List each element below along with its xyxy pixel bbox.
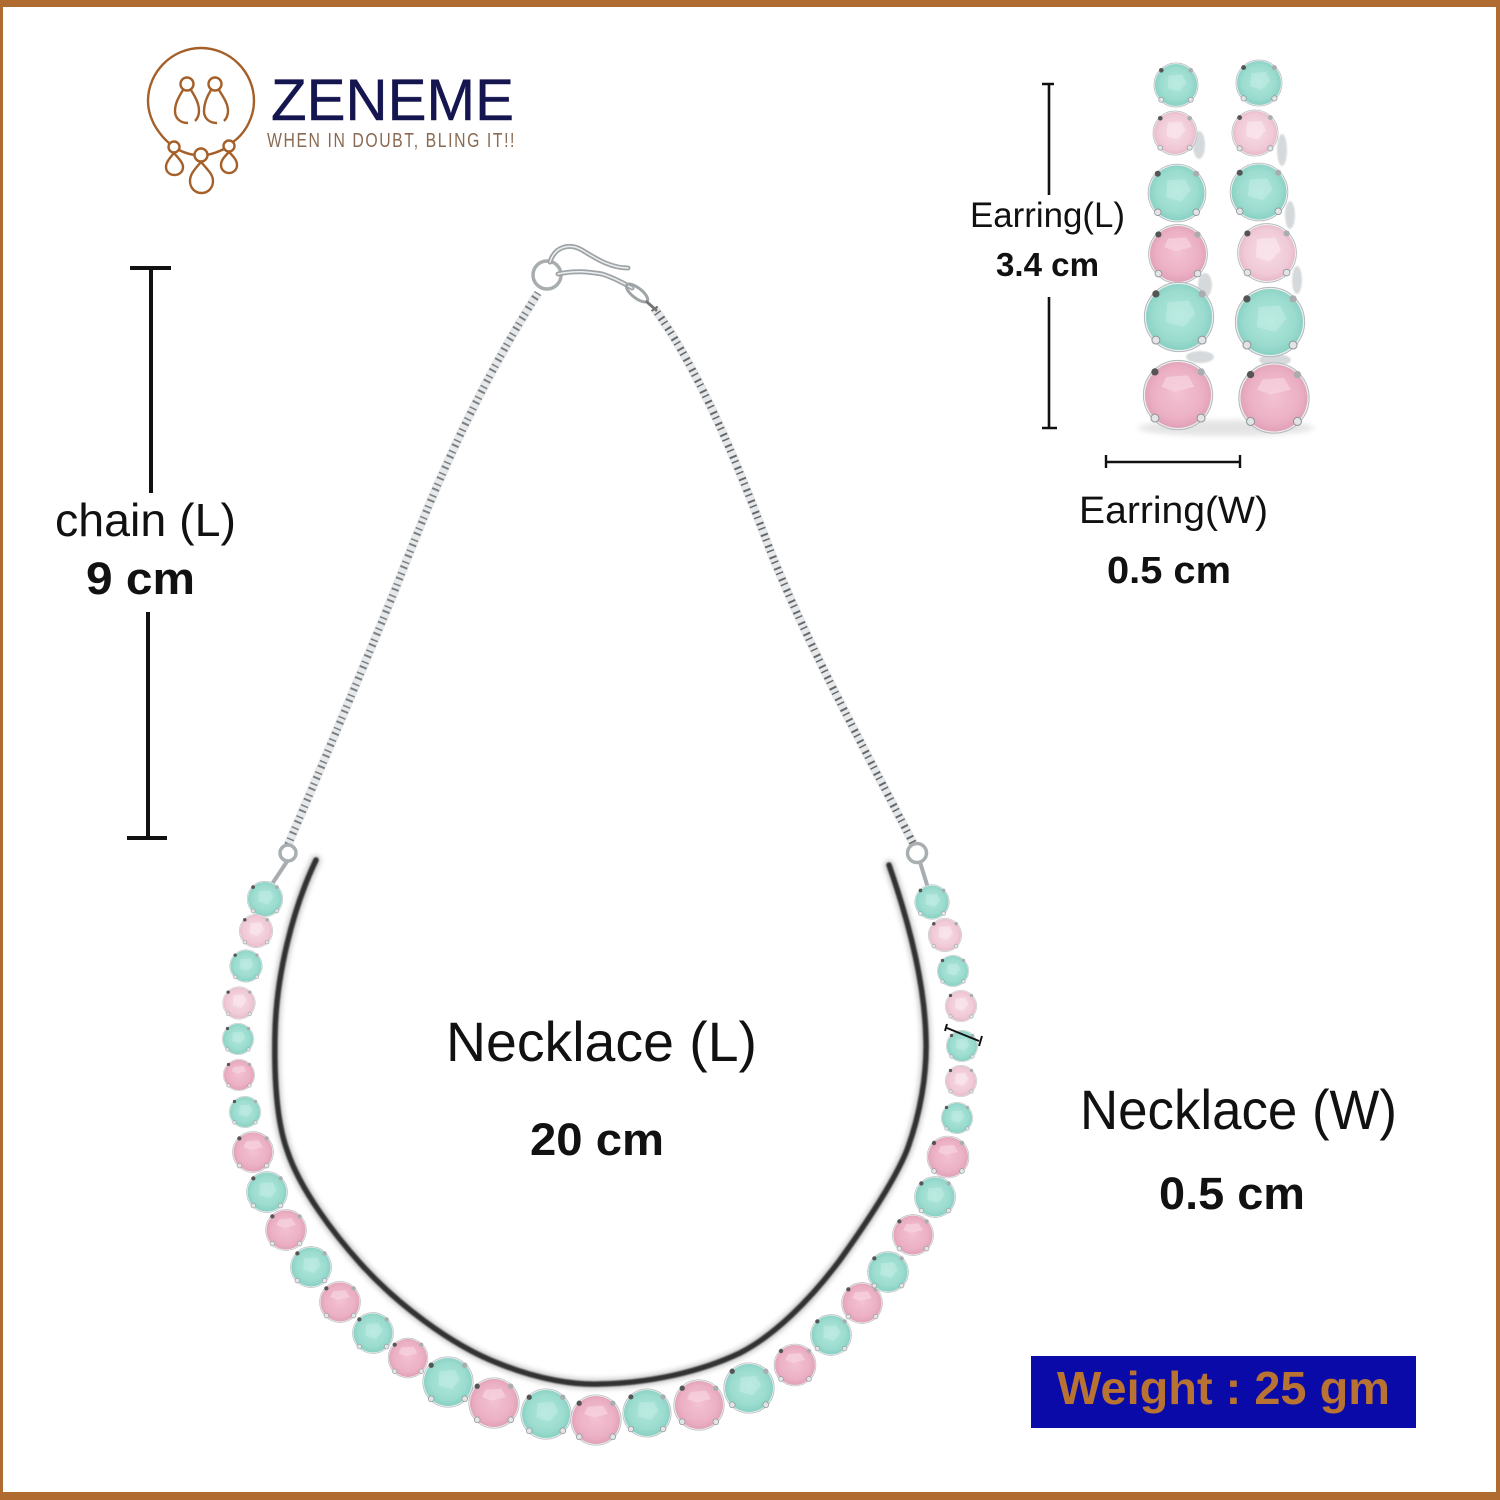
right earring [1230, 60, 1309, 433]
weight badge: Weight : 25 gm [1057, 1362, 1390, 1414]
earring (L) label: Earring(L) [970, 196, 1125, 235]
earring (W) dimension line [1106, 455, 1240, 468]
earring (W) label: 0.5 cm [1107, 550, 1231, 592]
earring (W) label: Earring(W) [1079, 490, 1268, 532]
earrings [1138, 60, 1314, 436]
logo: Zeneme [148, 48, 516, 193]
necklace stones [222, 881, 978, 1445]
chain (L) label [55, 494, 236, 604]
necklace (W) label: 0.5 cm [1159, 1168, 1305, 1219]
necklace (L) label: 20 cm [530, 1114, 664, 1165]
clasp hook [533, 246, 656, 310]
earring (L) label [970, 196, 1125, 283]
earring (L) label: 3.4 cm [996, 246, 1099, 283]
logo wordmark: ZENEME [271, 68, 514, 133]
necklace length arc [275, 860, 926, 1384]
chain (L) dimension line [127, 268, 171, 838]
right box chain [654, 308, 914, 845]
left end ring [272, 860, 288, 884]
right end ring [920, 862, 928, 888]
logo tagline: WHEN IN DOUBT, BLING IT!! [267, 130, 516, 152]
earring (W) label [1079, 490, 1268, 592]
earring (L) dimension line [1042, 84, 1057, 428]
earring metal backing [1186, 131, 1302, 366]
left earring [1143, 63, 1214, 430]
left box chain [288, 293, 538, 845]
necklace width tick [945, 1024, 982, 1046]
chain (L) label: 9 cm [86, 553, 195, 604]
necklace (L) label [446, 1010, 757, 1165]
weight badge [1031, 1356, 1416, 1428]
logo icon: necklace ring with earrings [148, 48, 254, 193]
earring shadow [1138, 420, 1314, 436]
necklace (L) label: Necklace (L) [446, 1010, 757, 1073]
necklace (W) label: Necklace (W) [1080, 1078, 1397, 1141]
necklace chain [272, 246, 928, 888]
necklace (W) label [1080, 1078, 1397, 1219]
chain (L) label: chain (L) [55, 494, 236, 546]
